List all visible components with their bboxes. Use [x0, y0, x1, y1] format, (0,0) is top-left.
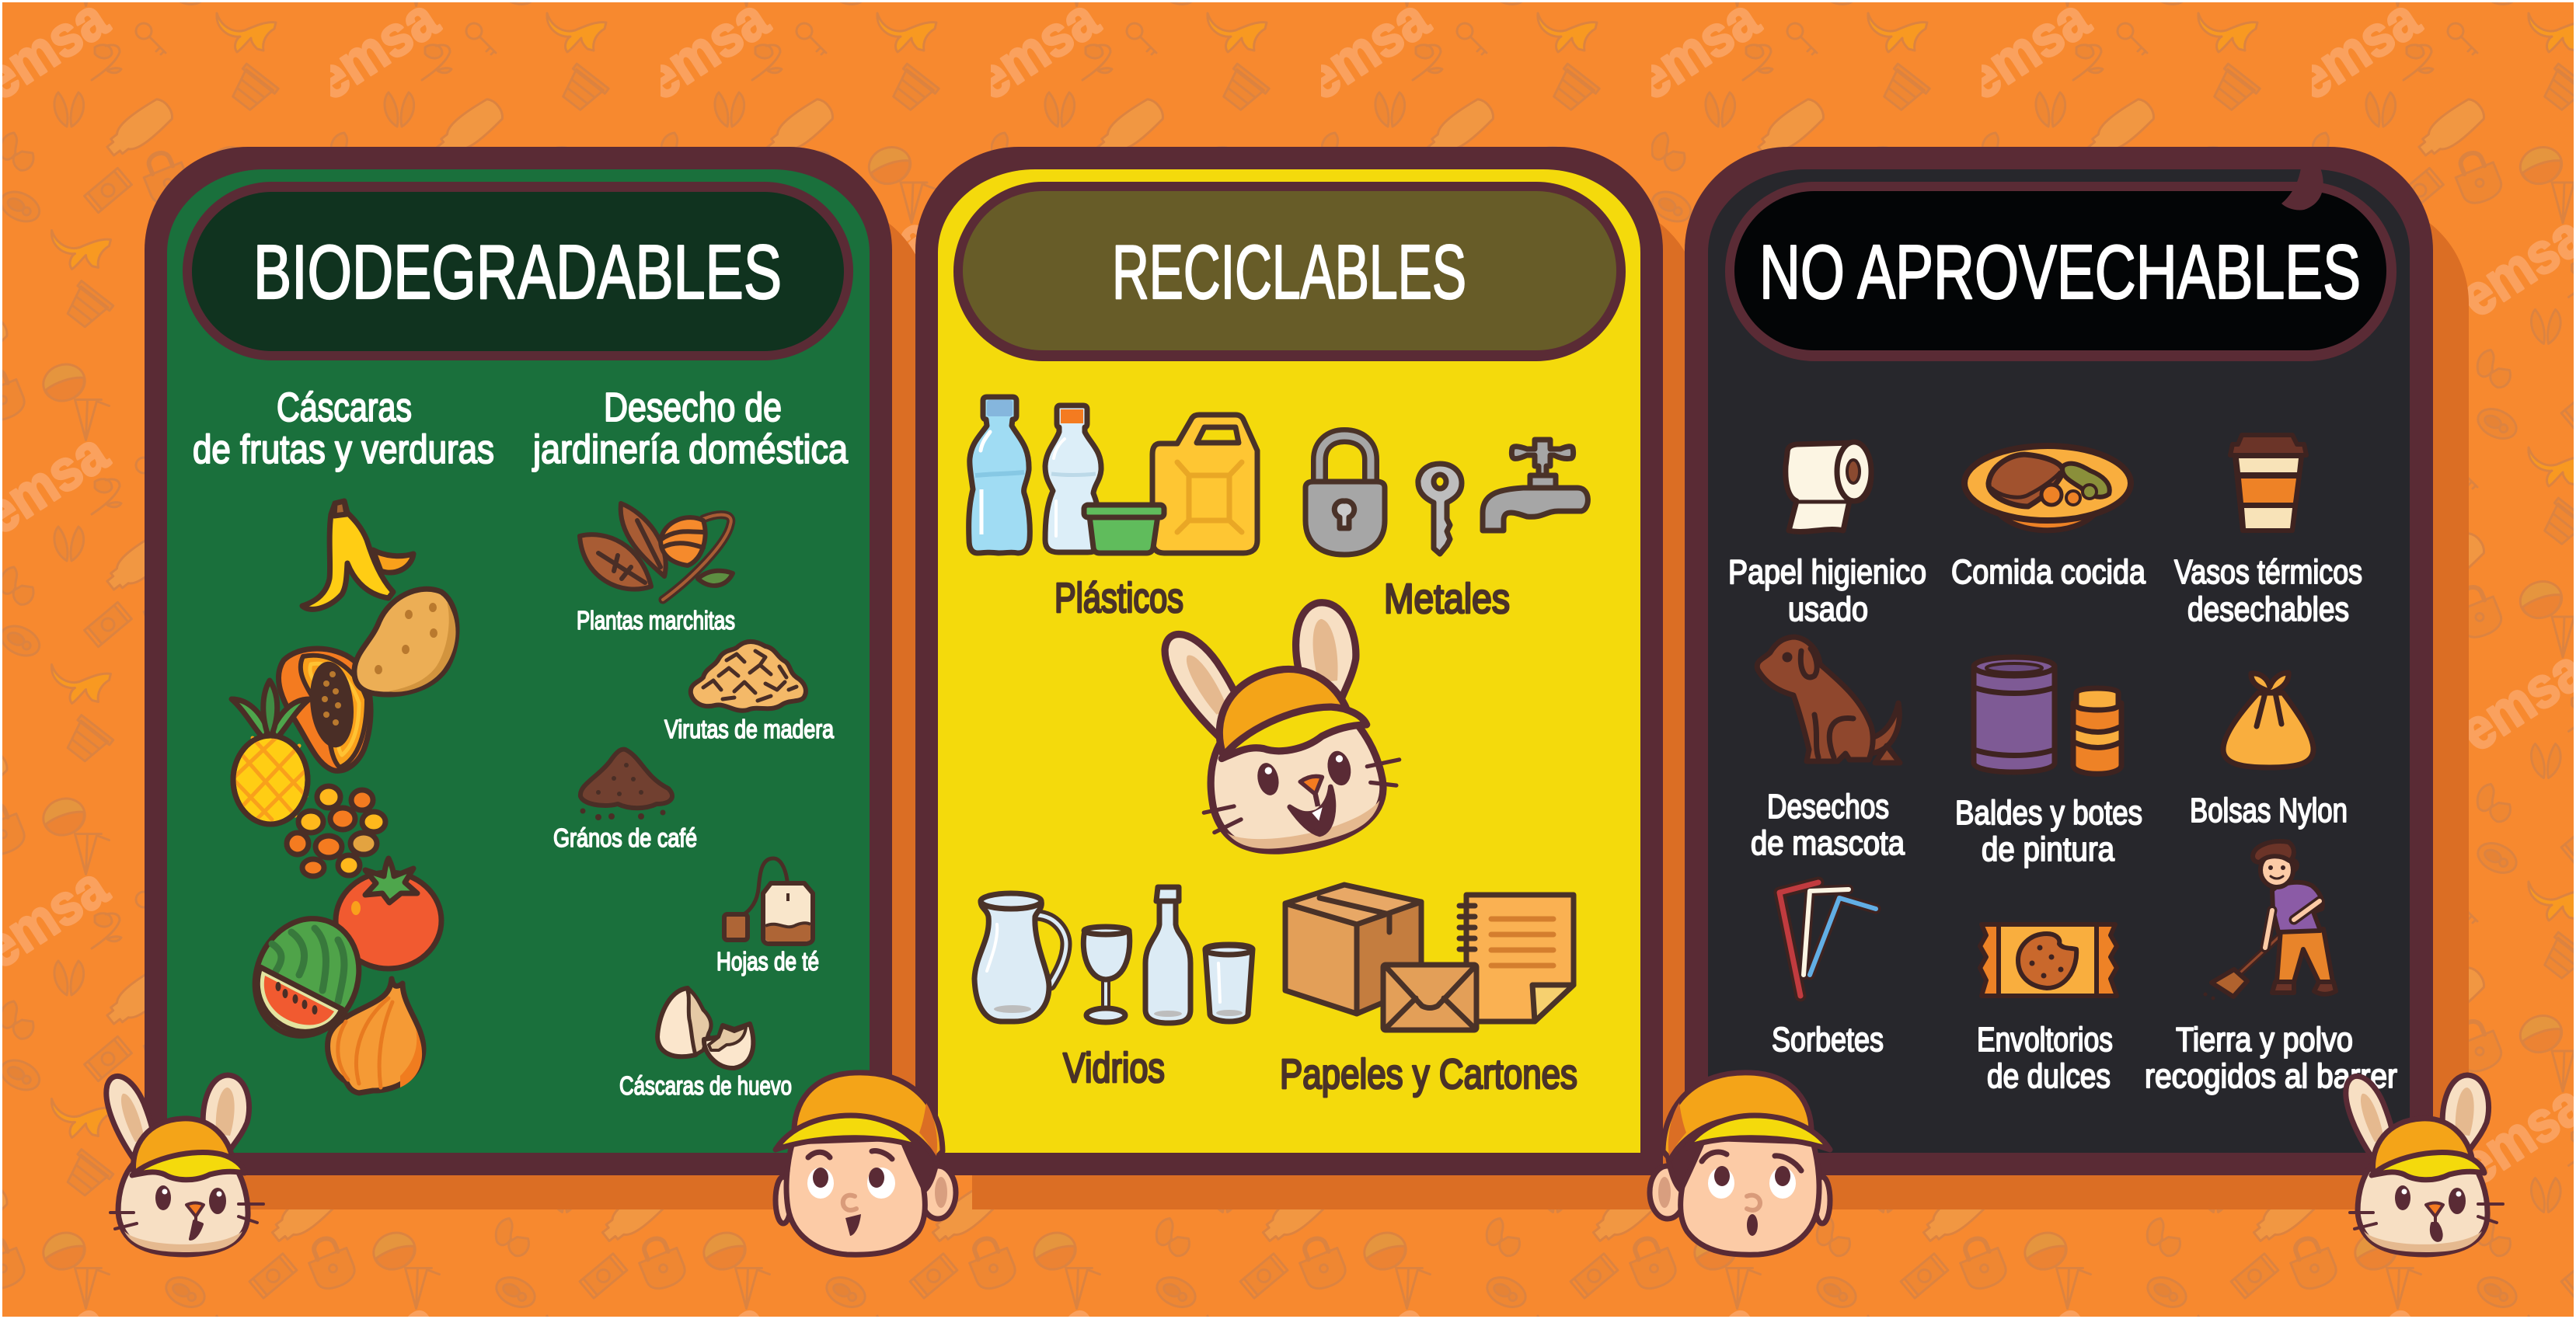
- icon: banana peel: [302, 501, 413, 609]
- item: candy wrappers: Envoltorios: [1977, 1021, 2113, 1059]
- item: coffee grounds: [553, 750, 697, 852]
- item: disposable thermal cups: desechables: [2187, 590, 2349, 628]
- subheading: fruit and vegetable peels: de frutas y verduras: [193, 427, 494, 472]
- item: used toilet paper: usado: [1788, 590, 1868, 628]
- item: straws: [1772, 882, 1884, 1059]
- item: wood shavings: Virutas de madera: [664, 715, 835, 743]
- item: disposable thermal cups: Vasos térmicos: [2174, 553, 2362, 591]
- icon: orange seeds: [287, 786, 385, 876]
- item: egg shells: [619, 988, 792, 1100]
- item: coffee grounds: Grános de café: [553, 823, 697, 852]
- icon: onion: [328, 979, 424, 1093]
- subheading: garden waste: Desecho de: [604, 385, 782, 430]
- icon: glass jug: [974, 893, 1066, 1021]
- label: metals: Metales: [1384, 576, 1510, 622]
- character: rabbit mascot: [1161, 593, 1413, 868]
- icon: cardboard box: [1285, 885, 1421, 1014]
- icon: green tub: [1084, 505, 1164, 553]
- item: tea bag: [716, 858, 819, 976]
- icon: pineapple: [232, 680, 309, 824]
- icon: papaya: [278, 649, 371, 771]
- heading: non recoverable: [1725, 168, 2396, 361]
- item: cooked food: [1951, 446, 2146, 591]
- item: disposable thermal cups: [2174, 435, 2362, 628]
- character: boy right: [1650, 1073, 1830, 1255]
- icon: faucet: [1483, 440, 1588, 531]
- heading: recyclables: RECICLABLES: [1112, 229, 1466, 315]
- panel: non recoverable: [1685, 147, 2433, 1175]
- item: pet waste: Desechos: [1767, 788, 1889, 826]
- item: straws: Sorbetes: [1772, 1021, 1884, 1059]
- item: buckets and paint cans: de pintura: [1982, 830, 2114, 868]
- icon: glass bottle: [1145, 887, 1190, 1023]
- icon: padlock: [1305, 436, 1385, 555]
- item: cooked food: Comida cocida: [1951, 553, 2146, 591]
- icon group: glass: [974, 887, 1253, 1091]
- heading: biodegradables: BIODEGRADABLES: [253, 229, 782, 315]
- item: nylon bags: Bolsas Nylon: [2190, 792, 2348, 830]
- icon: tumbler: [1205, 945, 1253, 1021]
- panel: recyclables: [915, 147, 1663, 1175]
- item: pet waste: de mascota: [1751, 824, 1905, 862]
- item: egg shells: Cáscaras de huevo: [619, 1071, 792, 1100]
- label: glass: Vidrios: [1063, 1045, 1165, 1091]
- panel drop shadows: [201, 202, 2469, 1209]
- icon: water bottle: [969, 397, 1030, 553]
- item: withered plants: [577, 503, 735, 635]
- subheading: garden waste: jardinería doméstica: [532, 427, 848, 472]
- icon: watermelon: [238, 903, 376, 1052]
- subheading: fruit and vegetable peels: [193, 385, 494, 472]
- icon: notebook: [1459, 895, 1574, 1021]
- heading: recyclables: [953, 182, 1626, 361]
- item: candy wrappers: [1977, 924, 2117, 1095]
- item: tea bag: Hojas de té: [716, 947, 819, 976]
- item: used toilet paper: Papel higienico: [1728, 553, 1926, 591]
- character: rabbit left: [106, 1075, 263, 1255]
- heading: non recoverable: NO APROVECHABLES: [1759, 229, 2361, 315]
- icon group: paper and cardboard: [1280, 885, 1577, 1098]
- character: rabbit right: [2346, 1075, 2503, 1255]
- icon: envelope: [1383, 965, 1476, 1030]
- subheading: fruit and vegetable peels: Cáscaras: [277, 385, 412, 430]
- icon: tomato: [336, 858, 441, 969]
- icon: potato: [354, 589, 457, 694]
- item: pet waste: [1751, 637, 1905, 862]
- label: paper and cardboard: Papeles y Cartones: [1280, 1051, 1577, 1098]
- icon group: plastics: [969, 397, 1257, 621]
- item: candy wrappers: de dulces: [1987, 1057, 2111, 1095]
- item: nylon bags: [2190, 673, 2348, 830]
- label: plastics: Plásticos: [1054, 575, 1183, 621]
- subheading: garden waste: [532, 385, 848, 472]
- icon: wine glass: [1083, 927, 1130, 1022]
- character: boy left: [776, 1073, 956, 1255]
- item: withered plants: Plantas marchitas: [577, 606, 735, 635]
- icon: key: [1418, 464, 1462, 554]
- item: buckets and paint cans: Baldes y botes: [1955, 794, 2142, 832]
- icon group: metals: [1305, 436, 1588, 622]
- icon group: fruit and vegetable peels: [232, 501, 457, 1093]
- item: floor dust, person sweeping: Tierra y polvo: [2176, 1021, 2353, 1059]
- panel: biodegradables: [145, 147, 892, 1175]
- icon: orange cap bottle: [1045, 405, 1101, 552]
- item: wood shavings: [664, 642, 835, 743]
- item: floor dust, person sweeping: [2145, 841, 2397, 1095]
- item: buckets and paint cans: [1955, 657, 2142, 868]
- heading: biodegradables: [183, 182, 853, 360]
- item: floor dust, person sweeping: recogidos al barrer: [2145, 1057, 2397, 1095]
- item: used toilet paper: [1728, 442, 1926, 628]
- icon: jerry can: [1152, 415, 1257, 553]
